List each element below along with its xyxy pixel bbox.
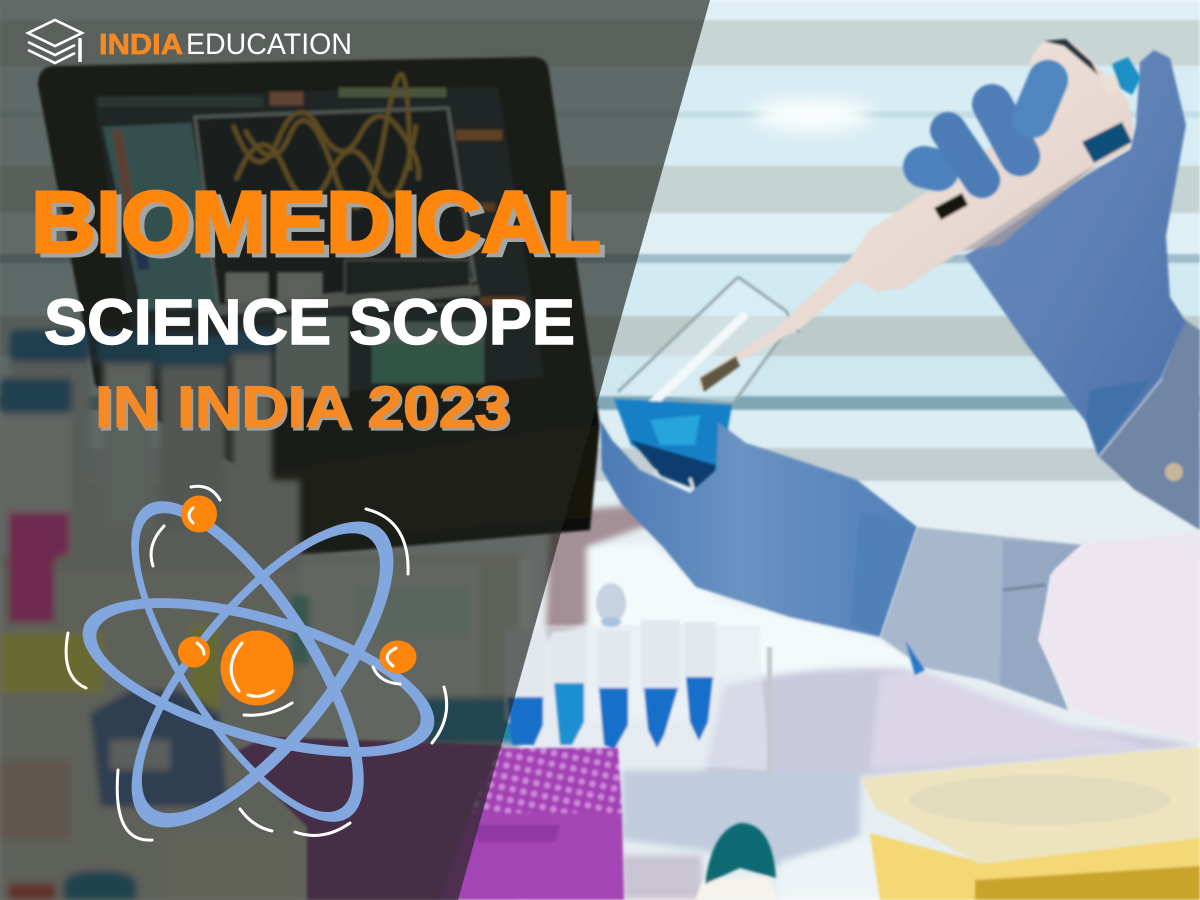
window blinds background xyxy=(0,0,1200,560)
lab coat sleeve xyxy=(1038,533,1200,743)
teal cap object xyxy=(695,823,778,900)
title: In India 2023: IN INDIA 2023 xyxy=(95,375,510,440)
pipette xyxy=(699,39,1141,392)
icon: stacked books xyxy=(28,20,82,63)
title: Science Scope: SCIENCE SCOPE xyxy=(44,286,575,358)
logo wordmark: INDIA xyxy=(99,29,183,61)
title: Biomedical: BIOMEDICAL xyxy=(31,174,601,271)
icon: atom xyxy=(66,468,451,866)
upper sleeve cuff xyxy=(1098,320,1200,530)
upper gloved hand xyxy=(965,50,1186,456)
lab bench xyxy=(530,505,1200,900)
logo: India Education xyxy=(28,20,352,63)
nucleus xyxy=(220,630,294,706)
electrons xyxy=(178,496,416,674)
lower sleeve cuff xyxy=(880,527,1083,710)
title: Biomedical: BIOMEDICAL xyxy=(36,178,606,275)
bottles and reagents left xyxy=(0,330,520,900)
title: In India 2023: IN INDIA 2023 xyxy=(97,378,512,443)
fingers gripping the pipette xyxy=(924,80,1048,180)
motion and highlight strokes xyxy=(66,486,447,840)
dark diagonal overlay panel xyxy=(0,0,710,900)
purple tube rack xyxy=(233,737,624,900)
yellow box xyxy=(861,747,1200,900)
test tubes with blue liquid xyxy=(504,583,772,774)
window highlight xyxy=(752,100,872,130)
laptop and monitor xyxy=(38,57,600,556)
logo: India Education: EDUCATION xyxy=(186,28,352,61)
orbit rings xyxy=(66,468,451,866)
lower gloved hand xyxy=(600,420,917,637)
glass flask with blue liquid xyxy=(614,277,799,498)
